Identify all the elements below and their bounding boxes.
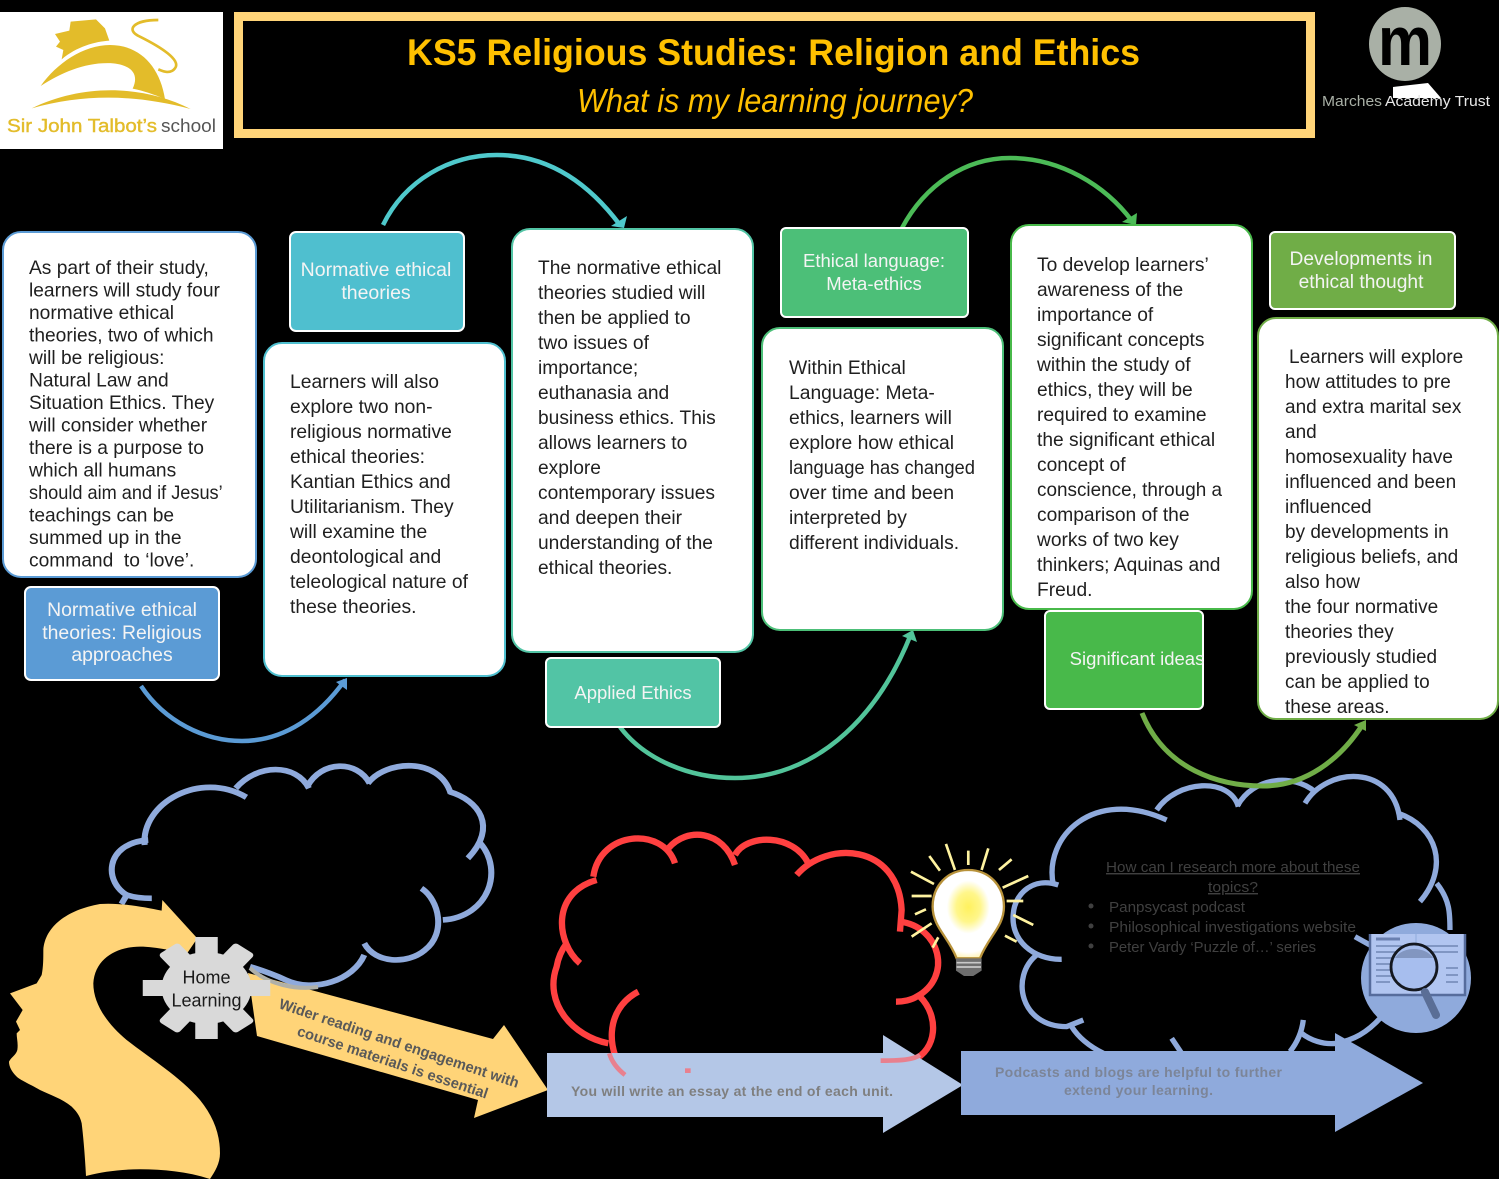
panel: developments text: and extra marital sex [1285, 397, 1462, 418]
arrow text: wider reading: course materials is essential [295, 1024, 490, 1102]
label: ethical language meta-ethics [781, 228, 968, 317]
panel: developments text: how attitudes to pre [1285, 372, 1451, 393]
panel: developments text: Learners will explore [1289, 347, 1463, 368]
panel: meta-ethics text: language has changed [789, 458, 975, 479]
panel: developments text: the four normative [1285, 597, 1438, 618]
panel: non-religious theories text: Learners will also [290, 372, 439, 393]
trust logo: Marches Academy Trust: Marches [1322, 94, 1382, 110]
text block: how can I research: Panpsycast podcast [1109, 900, 1245, 916]
panel: meta-ethics text [762, 328, 1003, 630]
panel: non-religious theories text: teleological nature of [290, 572, 469, 593]
panel: developments text: these areas. [1285, 697, 1390, 718]
panel: developments text: theories they [1285, 622, 1394, 643]
panel: religious approaches text: which all humans [28, 460, 176, 482]
panel: applied ethics text: ethical theories. [538, 558, 672, 579]
panel: religious approaches text: command to ‘love’. [29, 550, 194, 572]
panel: non-religious theories text: ethical theories: [290, 447, 425, 468]
text block: how can I research [1088, 860, 1360, 956]
panel: developments text: religious beliefs, and [1285, 547, 1458, 568]
panel: meta-ethics text: ethics, learners will [789, 408, 952, 429]
label: developments in ethical thought: ethical thought [1299, 272, 1424, 293]
panel: non-religious theories text: explore two non- [290, 397, 433, 418]
label: significant ideas [1045, 611, 1204, 709]
label: applied ethics [546, 658, 720, 727]
label: normative ethical theories religious approaches [25, 587, 219, 680]
panel: developments text: can be applied to [1285, 672, 1430, 693]
label: ethical language meta-ethics: Meta-ethics [826, 273, 922, 294]
panel: non-religious theories text: Kantian Ethics and [290, 472, 451, 493]
panel: applied ethics text: The normative ethical [538, 258, 721, 279]
arrow: podcasts [961, 1033, 1423, 1132]
panel: non-religious theories text [264, 343, 505, 676]
arrow: green-teal curve, applied ethics to meta-ethics [620, 630, 917, 778]
head silhouette with curved arrow [9, 900, 220, 1179]
trust logo: Marches Academy Trust: Academy Trust [1385, 94, 1490, 110]
panel: religious approaches text: theories, two of which [29, 326, 214, 346]
panel: significant ideas text: within the study of [1036, 355, 1191, 376]
panel: religious approaches text: summed up in the [29, 528, 182, 549]
school logo: Sir John Talbot's school [0, 12, 223, 149]
icon: gear with home learning: Home [182, 968, 231, 988]
panel: religious approaches text: Natural Law and [29, 370, 169, 392]
label: developments in ethical thought [1270, 232, 1455, 309]
panel: applied ethics text: understanding of the [538, 533, 713, 554]
panel: significant ideas text: significant concepts [1037, 330, 1204, 351]
panel: developments text [1258, 318, 1498, 719]
panel: significant ideas text: thinkers; Aquinas and [1037, 555, 1220, 576]
panel: religious approaches text [3, 232, 256, 577]
panel: applied ethics text: euthanasia and [538, 383, 669, 404]
panel: significant ideas text: ethics, they will be [1037, 380, 1193, 401]
panel: significant ideas text: concept of [1037, 455, 1126, 476]
panel: religious approaches text: normative ethical [29, 303, 174, 324]
label: significant ideas: Significant ideas [1070, 648, 1204, 669]
panel: significant ideas text: importance of [1037, 305, 1154, 326]
panel: developments text: also how [1285, 572, 1360, 593]
panel: non-religious theories text: Utilitarianism. They [290, 497, 454, 518]
cloud: right research cloud [1013, 776, 1450, 1053]
panel: applied ethics text: explore [538, 458, 601, 479]
panel: significant ideas text [1011, 225, 1252, 609]
label: normative ethical theories religious approaches: theories: Religious [42, 622, 202, 644]
panel: applied ethics text: importance; [538, 358, 638, 379]
label: normative ethical theories: Normative ethical [301, 259, 451, 281]
panel: meta-ethics text: Within Ethical [789, 358, 906, 379]
text block: how can I research: How can I research more about these [1106, 860, 1360, 876]
icon: light bulb [911, 844, 1033, 976]
panel: developments text: by developments in [1285, 522, 1449, 543]
title: KS5 Religious Studies: Religion and Ethics [407, 32, 1140, 73]
panel: religious approaches text: should aim and if Jesus’ [29, 483, 222, 504]
panel: non-religious theories text: will examine the [289, 522, 427, 543]
panel: significant ideas text: awareness of the [1037, 280, 1183, 301]
panel: religious approaches text: teachings can be [29, 506, 174, 526]
panel: significant ideas text: conscience, through a [1037, 480, 1222, 501]
panel: meta-ethics text: different individuals. [789, 533, 959, 554]
icon: gear with home learning [143, 937, 270, 1039]
text block: how can I research: Peter Vardy ‘Puzzle of…’ series [1109, 940, 1316, 956]
label: normative ethical theories religious approaches: approaches [71, 644, 173, 666]
label: normative ethical theories: theories [341, 282, 411, 304]
panel: applied ethics text: and deepen their [538, 508, 683, 529]
panel: meta-ethics text: Language: Meta- [789, 383, 935, 404]
panel: non-religious theories text: these theories. [290, 597, 416, 618]
arrow: developments curve [1142, 713, 1366, 786]
cloud: left home learning cloud [112, 766, 491, 985]
label: developments in ethical thought: Developments in [1290, 249, 1432, 270]
arrow text: wider reading: Wider reading and engagement with [277, 997, 521, 1092]
trust logo: Marches Academy Trust: m [1378, 2, 1432, 80]
panel: significant ideas text: required to examine [1037, 405, 1207, 426]
title banner [238, 16, 1310, 134]
panel: applied ethics text: two issues of [538, 333, 650, 354]
icon: book and magnifying glass [1361, 923, 1471, 1033]
icon: gear with home learning: Learning [171, 990, 242, 1010]
trust logo: Marches Academy Trust [1322, 2, 1490, 110]
panel: developments text: homosexuality have [1285, 447, 1453, 468]
panel: applied ethics text: business ethics. This [538, 408, 716, 429]
arrow: wider reading [248, 968, 548, 1118]
panel: significant ideas text: To develop learners’ [1037, 255, 1208, 276]
panel: applied ethics text [512, 229, 753, 652]
arrow text: podcasts: Podcasts and blogs are helpful to further [995, 1064, 1283, 1080]
subtitle: What is my learning journey? [577, 82, 974, 119]
panel: non-religious theories text: deontological and [290, 547, 441, 568]
label: applied ethics: Applied Ethics [574, 682, 692, 703]
panel: significant ideas text: Freud. [1037, 580, 1092, 601]
panel: significant ideas text: comparison of the [1037, 505, 1190, 526]
text block: how can I research: Philosophical investigations website [1109, 920, 1356, 936]
panel: developments text: and [1285, 422, 1317, 443]
panel: religious approaches text: As part of their study, [29, 258, 209, 279]
school logo: Sir John Talbot's school: Sir John Talbot’s [7, 115, 157, 136]
text block: how can I research: topics? [1208, 880, 1258, 896]
panel: meta-ethics text: explore how ethical [789, 433, 954, 454]
arrow: blue curve, religious approaches to non-religious theories [141, 678, 347, 741]
arrow: essay [547, 1035, 963, 1133]
arrow: green curve, meta-ethics to significant ideas [902, 158, 1137, 228]
arrow text: podcasts: extend your learning. [1064, 1082, 1213, 1098]
school logo: Sir John Talbot's school: school [161, 115, 216, 136]
panel: non-religious theories text: religious normative [290, 422, 452, 443]
panel: developments text: influenced [1285, 497, 1372, 518]
panel: significant ideas text: works of two key [1036, 530, 1179, 551]
panel: significant ideas text: the significant ethical [1037, 430, 1215, 451]
cloud: red essay cloud [553, 835, 938, 1075]
panel: religious approaches text: will be religious: [28, 348, 164, 369]
label: ethical language meta-ethics: Ethical language: [803, 250, 945, 271]
panel: religious approaches text: learners will study four [29, 280, 220, 302]
panel: religious approaches text: will consider whether [28, 416, 208, 436]
panel: applied ethics text: theories studied will [538, 283, 705, 304]
panel: developments text: influenced and been [1285, 472, 1456, 493]
panel: developments text: previously studied [1285, 647, 1437, 668]
label: normative ethical theories [290, 232, 464, 331]
panel: meta-ethics text: interpreted by [789, 508, 907, 529]
panel: religious approaches text: there is a purpose to [29, 438, 204, 459]
arrow text: essay: You will write an essay at the end of each unit. [571, 1083, 893, 1099]
label: normative ethical theories religious approaches: Normative ethical [47, 599, 197, 621]
panel: applied ethics text: contemporary issues [538, 483, 715, 504]
panel: religious approaches text: Situation Ethics. They [29, 393, 215, 414]
arrow: teal curve, normative theories to applied text [383, 155, 627, 228]
panel: applied ethics text: then be applied to [538, 308, 691, 329]
panel: applied ethics text: allows learners to [538, 433, 687, 454]
panel: meta-ethics text: over time and been [789, 483, 954, 504]
